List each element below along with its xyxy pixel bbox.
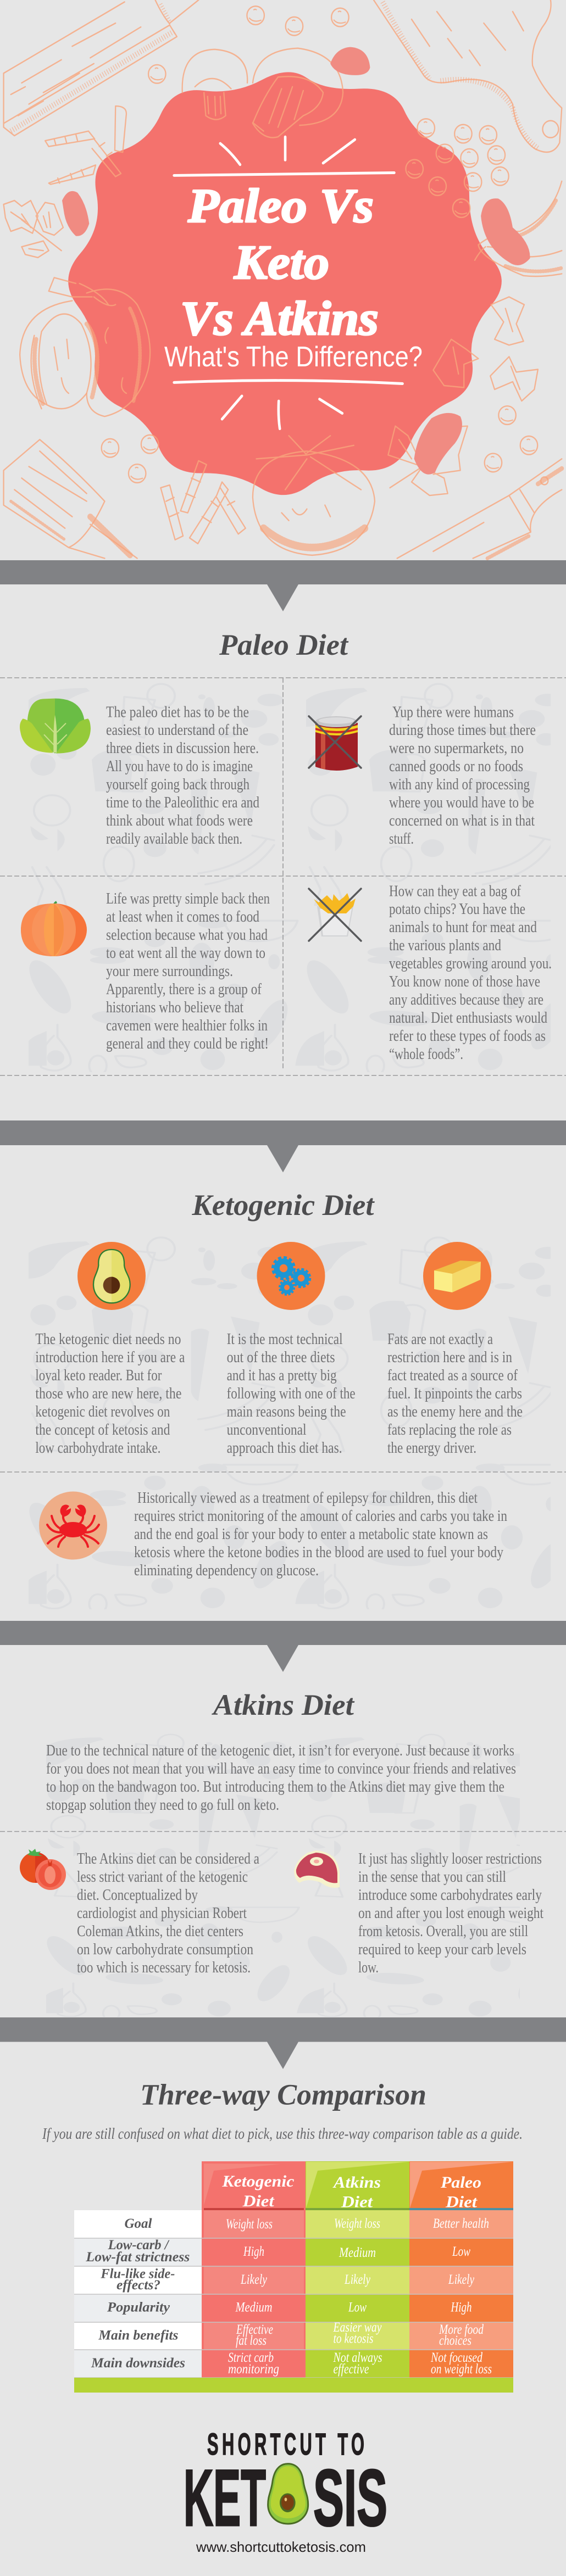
text: paleo intro: All you have to do is imagine xyxy=(106,757,253,775)
text: paleo intro xyxy=(106,703,259,847)
text: atkins variant: on low carbohydrate consumption xyxy=(77,1941,253,1958)
title xyxy=(182,188,378,336)
text: simple life: general and they could be right! xyxy=(106,1035,269,1052)
panel: atkins diet xyxy=(0,1688,566,2021)
column headers: Diet xyxy=(445,2193,478,2211)
ketogenic column values: Effective xyxy=(236,2322,273,2337)
text: simple life: to eat went all the way down to xyxy=(106,944,265,962)
text: simple life: historians who believe that xyxy=(106,999,243,1016)
heading: Three-way Comparison xyxy=(140,2078,426,2111)
paleo column values xyxy=(430,2216,492,2377)
ketogenic column values: Medium xyxy=(235,2300,273,2315)
atkins column values: Likely xyxy=(344,2272,371,2287)
ketogenic column values: fat loss xyxy=(236,2333,267,2348)
hero food line drawings xyxy=(4,0,562,558)
text: paleo intro: three diets in discussion here. xyxy=(106,739,259,757)
text: most technical: and it has a pretty big xyxy=(227,1367,337,1384)
column headers xyxy=(221,2172,481,2211)
text: fats as fuel: fact treated as a source of xyxy=(387,1367,518,1384)
column headers: Paleo xyxy=(440,2173,481,2192)
text: atkins variant xyxy=(77,1850,259,1976)
logo right letters: SIS xyxy=(313,2453,387,2542)
icon: penne pasta xyxy=(45,106,126,185)
text: fats as fuel: Fats are not exactly a xyxy=(387,1330,493,1348)
text: simple life: at least when it comes to food xyxy=(106,908,259,925)
subtitle: What's The Difference? xyxy=(164,341,423,373)
icon: bell pepper xyxy=(20,277,150,416)
icon: tomato xyxy=(20,1849,66,1890)
title: Paleo Vs xyxy=(187,180,374,233)
text: whole foods xyxy=(389,882,552,1063)
text: most technical: unconventional xyxy=(227,1421,307,1438)
section banner 1 xyxy=(0,560,566,611)
text: no supermarkets: where you would have to be xyxy=(389,794,534,811)
text: atkins variant: diet. Conceptualized by xyxy=(77,1886,198,1904)
row labels xyxy=(85,2216,190,2371)
hero scalloped badge xyxy=(68,72,502,495)
heading: Atkins Diet xyxy=(212,1688,355,1721)
ketogenic column values: Likely xyxy=(240,2272,268,2287)
text: atkins variant: The Atkins diet can be considered a xyxy=(77,1850,259,1867)
text: fats as fuel: the energy driver. xyxy=(387,1439,476,1457)
text: paleo intro: time to the Paleolithic era and xyxy=(106,794,259,811)
text: simple life: cavemen were healthier folks in xyxy=(106,1017,268,1034)
icon: zucchini xyxy=(475,181,562,276)
text: keto intro: low carbohydrate intake. xyxy=(35,1439,160,1457)
text: keto intro: the concept of ketosis and xyxy=(35,1421,170,1438)
atkins column values: effective xyxy=(333,2362,369,2377)
text: paleo intro: The paleo diet has to be the xyxy=(106,703,249,721)
row labels: Low-fat strictness xyxy=(85,2250,190,2265)
title rays and rules xyxy=(174,137,403,429)
icon: bowtie pasta xyxy=(433,297,538,401)
text: paleo intro: yourself going back through xyxy=(106,776,249,793)
icon: lettuce xyxy=(20,699,91,754)
row labels: Low-carb / xyxy=(108,2238,170,2252)
ketogenic column values: monitoring xyxy=(228,2362,279,2377)
text: epilepsy history: Historically viewed as a treatment of epilepsy for children, this diet xyxy=(137,1489,478,1507)
text: no supermarkets: Yup there were humans xyxy=(392,703,514,721)
heading: Paleo Diet xyxy=(219,628,349,661)
text: no supermarkets: were no supermarkets, no xyxy=(389,739,524,757)
icon: butter circle xyxy=(423,1242,491,1310)
heading: Ketogenic Diet xyxy=(191,1189,375,1222)
paleo column values: choices xyxy=(439,2333,471,2348)
comparison table xyxy=(74,2161,513,2393)
text: fats as fuel xyxy=(387,1330,523,1457)
panel: paleo diet xyxy=(0,628,566,1076)
paleo column values: Likely xyxy=(448,2272,475,2287)
atkins column values: Weight loss xyxy=(334,2216,380,2231)
icon: spatula xyxy=(4,439,137,558)
atkins column values: Medium xyxy=(339,2245,376,2260)
food silhouette background xyxy=(18,684,566,1076)
panel: hero xyxy=(4,0,562,558)
text: most technical: approach this diet has. xyxy=(227,1439,342,1457)
text: fats as fuel: as the enemy here and the xyxy=(387,1403,523,1420)
text: keto intro: loyal keto reader. But for xyxy=(35,1367,162,1384)
text: most technical: It is the most technical xyxy=(227,1330,343,1348)
section banner 4 xyxy=(0,2017,566,2069)
icon: crab circle xyxy=(39,1492,107,1560)
text: keto intro xyxy=(35,1330,185,1457)
icon: avocado circle xyxy=(77,1242,146,1310)
icon: cutting board left xyxy=(4,0,198,136)
text: epilepsy history: eliminating dependency on glucose. xyxy=(134,1562,319,1579)
section banner 2 xyxy=(0,1120,566,1172)
panel: ketogenic diet xyxy=(0,1189,566,1614)
logo top line: SHORTCUT TO xyxy=(207,2427,364,2461)
text: simple life: Apparently, there is a group of xyxy=(106,980,262,998)
text: atkins variant: Coleman Atkins, the diet centers xyxy=(77,1922,243,1940)
icon: crossed-out fries xyxy=(309,889,361,941)
row labels: Main benefits xyxy=(98,2328,178,2343)
column headers: Atkins xyxy=(332,2173,381,2192)
decorative blobs xyxy=(62,47,530,475)
text: looser restrictions: in the sense that you can still xyxy=(358,1868,506,1886)
paleo column values: More food xyxy=(439,2322,484,2337)
text: atkins variant: too which is necessary for ketosis. xyxy=(77,1959,251,1976)
table row backgrounds xyxy=(74,2161,513,2393)
text: no supermarkets: during those times but there xyxy=(389,721,536,739)
text: simple life xyxy=(106,890,270,1052)
text: fats as fuel: fats replacing the role as xyxy=(387,1421,512,1438)
text: epilepsy history xyxy=(134,1489,507,1579)
atkins column values: Low xyxy=(348,2300,367,2315)
icon: gears circle xyxy=(257,1242,325,1310)
text: atkins intro: stopgap solution they need to go full on keto. xyxy=(46,1796,279,1814)
text: keto intro: introduction here if you are a xyxy=(35,1348,185,1366)
text: atkins variant: cardiologist and physician Robert xyxy=(77,1904,247,1922)
text: simple life: selection because what you had xyxy=(106,926,268,944)
website url: www.shortcuttoketosis.com xyxy=(196,2539,366,2555)
row labels: Goal xyxy=(124,2216,152,2231)
icon: twisted pasta xyxy=(160,461,246,544)
text: most technical: out of the three diets xyxy=(227,1348,335,1366)
column headers: Diet xyxy=(341,2193,374,2211)
icon: crossed-out can xyxy=(309,716,361,771)
row labels: effects? xyxy=(116,2278,160,2293)
row labels: Flu-like side- xyxy=(100,2266,175,2282)
text: whole foods: How can they eat a bag of xyxy=(389,882,521,900)
atkins column values: to ketosis xyxy=(333,2332,374,2346)
text: no supermarkets: canned goods or no foods xyxy=(389,757,523,775)
column headers: Ketogenic xyxy=(221,2172,294,2190)
text: keto intro: The ketogenic diet needs no xyxy=(35,1330,181,1348)
paleo column values: Low xyxy=(452,2244,470,2259)
text: no supermarkets xyxy=(389,703,536,847)
text: looser restrictions: required to keep your carb levels xyxy=(358,1941,526,1958)
atkins column values: Not always xyxy=(333,2350,382,2365)
text: looser restrictions xyxy=(358,1850,543,1976)
section banner 3 xyxy=(0,1621,566,1672)
text: looser restrictions: low. xyxy=(358,1959,379,1976)
icon: parsley left xyxy=(4,200,63,258)
atkins column values xyxy=(333,2216,382,2377)
text: atkins variant: less strict variant of the ketogenic xyxy=(77,1868,248,1886)
text: fats as fuel: fuel. It pinpoints the carbs xyxy=(387,1385,522,1402)
title: Keto xyxy=(234,236,329,289)
text: keto intro: ketogenic diet revolves on xyxy=(35,1403,170,1420)
text: paleo intro: readily available back then. xyxy=(106,830,242,847)
food silhouette background xyxy=(36,1735,560,2021)
icon: parsley right xyxy=(388,426,468,495)
ketogenic column values xyxy=(226,2217,279,2377)
text: simple life: Life was pretty simple back then xyxy=(106,890,270,907)
text: atkins intro xyxy=(46,1742,516,1814)
text: whole foods: potato chips? You have the xyxy=(389,900,525,918)
text: paleo intro: think about what foods were xyxy=(106,812,253,829)
text: most technical: following with one of the xyxy=(227,1385,356,1402)
paleo column values: Better health xyxy=(433,2216,489,2231)
column headers: Diet xyxy=(242,2192,275,2210)
text: most technical xyxy=(227,1330,356,1457)
logo: shortcut to ketosis xyxy=(184,2427,387,2555)
atkins column values: Easier way xyxy=(333,2320,382,2335)
panel: three-way comparison xyxy=(42,2078,523,2393)
text: epilepsy history: and the end goal is for your body to enter a metabolic state known as xyxy=(134,1525,488,1543)
icon: mushrooms xyxy=(182,48,343,137)
text: no supermarkets: concerned on what is in that xyxy=(389,812,535,829)
logo left letters: KET xyxy=(184,2453,266,2542)
logo avocado xyxy=(268,2464,308,2524)
text: whole foods: the various plants and xyxy=(389,936,501,954)
paleo column values: on weight loss xyxy=(431,2362,492,2377)
icon: pumpkin xyxy=(21,902,87,956)
paleo column values: Not focused xyxy=(430,2350,482,2365)
text: no supermarkets: stuff. xyxy=(389,830,414,847)
text: keto intro: those who are new here, the xyxy=(35,1385,181,1402)
title: Vs Atkins xyxy=(180,292,379,345)
text: whole foods: “whole foods”. xyxy=(389,1045,463,1063)
ketogenic column values: Weight loss xyxy=(226,2217,273,2232)
icon: knife xyxy=(397,459,562,558)
food silhouette background xyxy=(18,1237,566,1614)
ketogenic column values: High xyxy=(243,2244,264,2259)
text: no supermarkets: with any kind of processing xyxy=(389,776,530,793)
row labels: Main downsides xyxy=(91,2356,185,2371)
text: paleo intro: easiest to understand of the xyxy=(106,721,248,739)
icon: peas xyxy=(102,6,537,483)
icon: steak xyxy=(294,1850,340,1888)
ketogenic column values: Strict carb xyxy=(228,2350,274,2365)
icon: tomato xyxy=(253,436,375,555)
text: fats as fuel: restriction here and is in xyxy=(387,1348,512,1366)
row labels: Popularity xyxy=(107,2300,170,2315)
icon: cutting board right xyxy=(374,0,562,152)
text: simple life: your mere surroundings. xyxy=(106,962,233,980)
paleo column values: High xyxy=(451,2300,471,2315)
text: most technical: main reasons being the xyxy=(227,1403,346,1420)
